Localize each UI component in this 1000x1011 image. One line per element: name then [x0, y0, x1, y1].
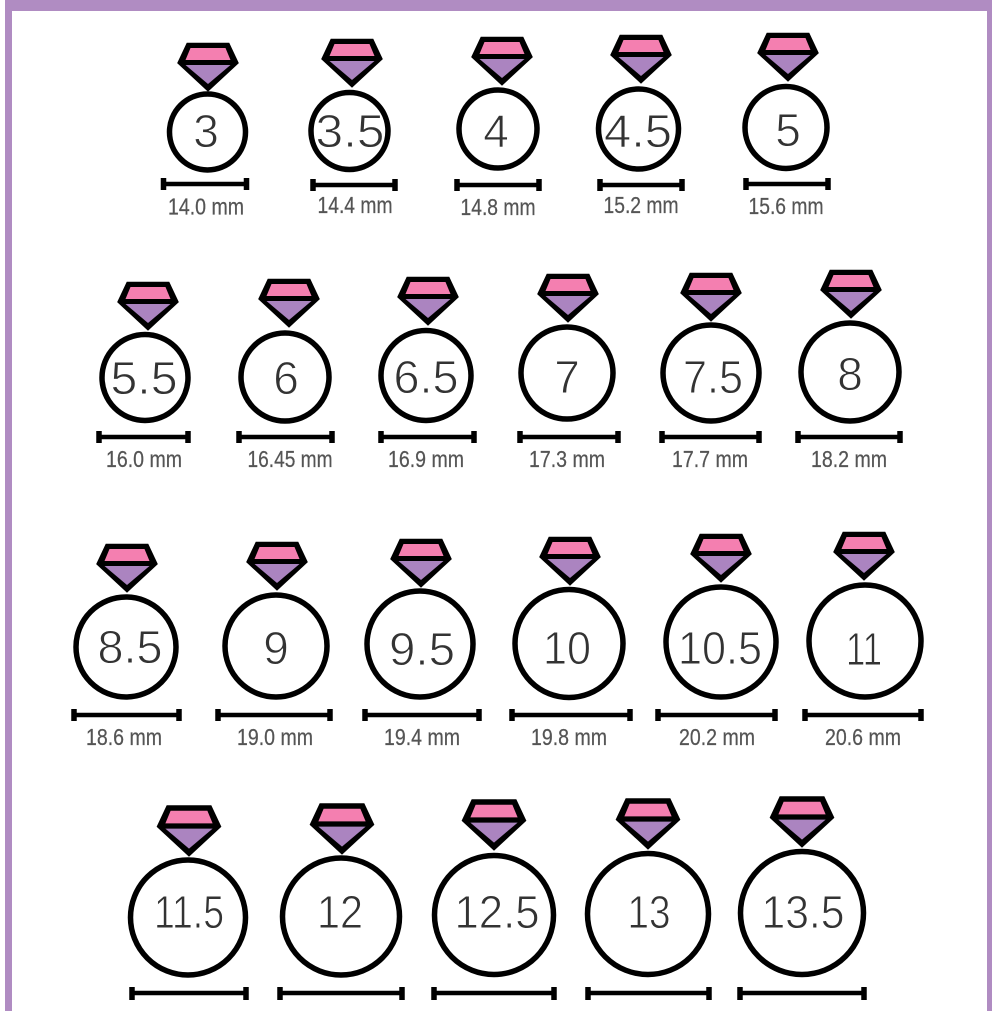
ring: size 8: 8 [837, 348, 863, 400]
ring: size 11.5: 11.5 [154, 886, 224, 938]
ring: size 9.5 [363, 542, 481, 750]
ring: size 6.5 [379, 280, 476, 472]
ring: size 4.5 [598, 38, 684, 218]
ring: size 6: 16.45 mm [248, 446, 332, 472]
ring: size 11: 20.6 mm [825, 724, 901, 750]
ring: size 9: 19.0 mm [237, 724, 313, 750]
ring: size 5.5: 5.5 [110, 352, 178, 404]
ring: size 4: 4 [483, 105, 509, 157]
ring: size 5: 5 [775, 104, 801, 156]
ring: size 10: 10 [543, 622, 591, 674]
ring: size 11: 11 [846, 623, 882, 675]
ring: size 6: 6 [273, 352, 299, 404]
ring: size 6 [237, 282, 334, 472]
ring: size 10.5: 10.5 [678, 622, 762, 674]
ring: size 5.5 [97, 284, 190, 472]
ring: size 13.5: 13.5 [762, 886, 844, 938]
ring: size 10.5: 20.2 mm [679, 724, 755, 750]
ring: size 6.5: 16.9 mm [388, 446, 464, 472]
ring: size 9.5: 9.5 [389, 623, 455, 675]
ring: size 8.5: 8.5 [98, 621, 162, 673]
ring: size 8: 18.2 mm [811, 446, 887, 472]
ring: size 3 [163, 46, 248, 220]
ring: size 4.5: 15.2 mm [604, 192, 678, 218]
ring: size 9 [216, 544, 332, 750]
ring: size 13: 13 [628, 886, 670, 938]
ring: size 8 [796, 272, 902, 472]
ring: size 7.5: 17.7 mm [672, 446, 748, 472]
ring: size 7: 17.3 mm [529, 446, 605, 472]
ring: size 11 [803, 534, 923, 750]
ring: size 8.5 [72, 546, 181, 750]
ring: size 3.5: 3.5 [316, 105, 384, 157]
ring: size 7: 7 [554, 351, 580, 403]
ring: size 3: 14.0 mm [168, 194, 244, 220]
ring: size 12.5 [432, 802, 556, 1000]
ring: size 10: 19.8 mm [531, 724, 607, 750]
ring: size 3.5: 14.4 mm [318, 192, 392, 218]
ring: size 11.5 [130, 808, 248, 1000]
ring: size 3: 3 [193, 105, 219, 157]
ring: size 5: 15.6 mm [748, 193, 824, 219]
ring: size 4 [455, 40, 541, 220]
ring: size 10.5 [656, 536, 777, 750]
ring: size 5 [744, 36, 830, 219]
ring: size 4.5: 4.5 [604, 105, 672, 157]
ring: size 12: 12 [317, 886, 363, 938]
ring: size 8.5: 18.6 mm [86, 724, 162, 750]
ring: size 3.5 [311, 42, 397, 218]
ring: size 9: 9 [263, 622, 289, 674]
ring: size 13.5 [738, 799, 866, 1000]
ring: size 9.5: 19.4 mm [384, 724, 460, 750]
ring: size 4: 14.8 mm [460, 194, 536, 220]
ring: size 13 [586, 801, 711, 1000]
ring: size 7.5: 7.5 [683, 351, 743, 403]
ring: size 7.5 [660, 276, 761, 472]
ring: size 5.5: 16.0 mm [106, 446, 182, 472]
ring: size 12.5: 12.5 [454, 886, 540, 938]
ring: size 6.5: 6.5 [394, 351, 458, 403]
ring: size 12 [278, 806, 404, 1000]
ring: size 7 [518, 276, 620, 472]
ring: size 10 [510, 540, 632, 750]
